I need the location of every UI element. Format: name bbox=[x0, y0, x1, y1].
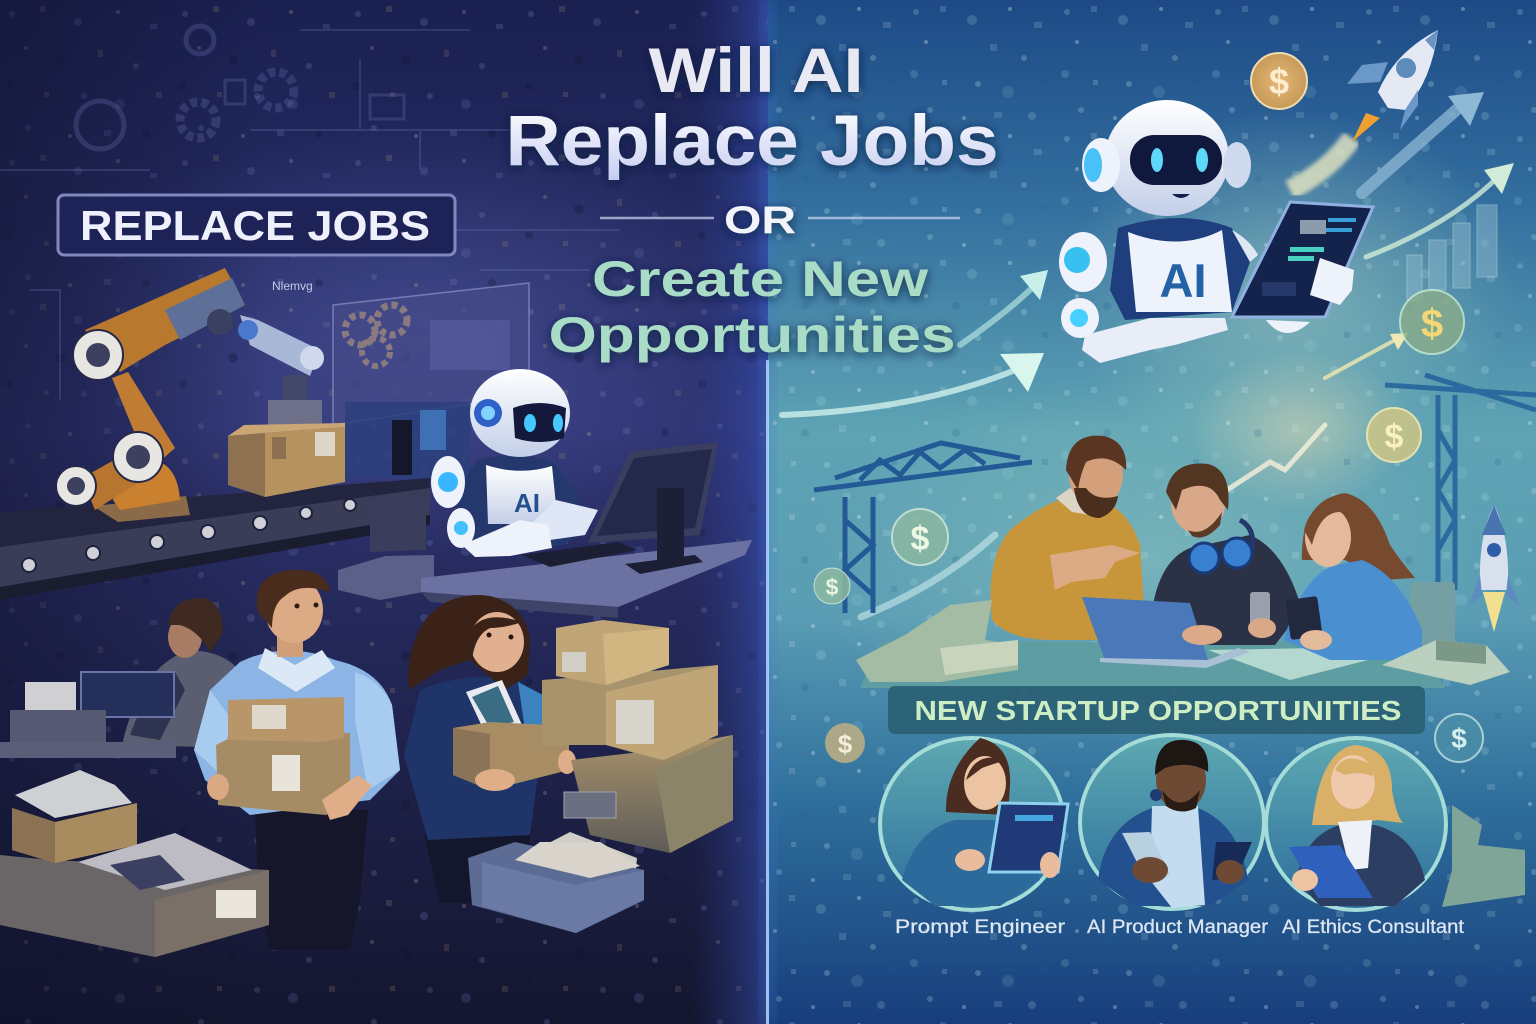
bar chart silhouettes bbox=[1407, 205, 1497, 300]
icon: background office worker bbox=[0, 598, 245, 758]
icon: dollar coins: $ bbox=[838, 729, 853, 759]
title line: OR: OR bbox=[724, 199, 796, 242]
icon: dollar coins: $ bbox=[1451, 723, 1467, 754]
conveyor belt bbox=[0, 478, 430, 600]
icon: orange robotic arm bbox=[56, 268, 324, 522]
icon: flying robot with tablet bbox=[1059, 100, 1373, 363]
icon: rocket with flame bbox=[1290, 30, 1438, 190]
boxes under conveyor bbox=[338, 495, 434, 600]
icon: man in yellow sweater bbox=[990, 436, 1146, 640]
label: AI Ethics Consultant: AI Ethics Consultant bbox=[1282, 917, 1465, 938]
icon: crane left bbox=[814, 443, 1032, 613]
banner: New Startup Opportunities: NEW STARTUP OPPORTUNITIES bbox=[914, 695, 1402, 726]
badge: Replace Jobs bbox=[58, 195, 455, 255]
label: Prompt Engineer: Prompt Engineer bbox=[895, 917, 1066, 938]
badge: Replace Jobs: REPLACE JOBS bbox=[80, 202, 430, 249]
file bin bbox=[468, 832, 644, 933]
desk bbox=[421, 540, 752, 618]
panel: left dark background bbox=[0, 0, 780, 1024]
stacked cardboard boxes bbox=[542, 620, 733, 853]
icon: dollar coins bbox=[814, 53, 1483, 763]
title line: Replace Jobs: Replace Jobs bbox=[506, 102, 998, 181]
icon: office robot with AI chest bbox=[431, 369, 598, 557]
icon: dollar coins: $ bbox=[826, 574, 839, 600]
box on conveyor bbox=[228, 423, 345, 497]
banner: New Startup Opportunities bbox=[888, 686, 1425, 734]
screen panel behind robot arm bbox=[272, 279, 529, 478]
icon: flying robot with tablet: AI bbox=[1160, 254, 1206, 307]
title line: Will AI: Will AI bbox=[648, 36, 864, 106]
icon: dollar coins: $ bbox=[1385, 418, 1404, 456]
icon: dollar coins: $ bbox=[1421, 302, 1443, 346]
boxes and papers bottom left bbox=[0, 770, 269, 957]
arrows across right panel bbox=[782, 92, 1514, 617]
icon: man carrying boxes bbox=[194, 570, 400, 950]
table and laptop bbox=[860, 582, 1455, 688]
role: AI Ethics Consultant portrait bbox=[1266, 738, 1446, 910]
icon: crane right bbox=[1385, 375, 1536, 590]
icon: woman in blue shirt bbox=[1248, 493, 1422, 660]
role: AI Product Manager portrait bbox=[1080, 735, 1264, 909]
background gears and circuits bbox=[0, 26, 620, 400]
title line: Create New: Create New bbox=[592, 251, 928, 307]
role: Prompt Engineer portrait bbox=[880, 738, 1068, 910]
icon: computer monitor bbox=[522, 442, 718, 574]
icon: laptop bbox=[1082, 597, 1250, 668]
title block bbox=[506, 36, 998, 363]
lines beside OR bbox=[600, 217, 960, 219]
panel: right bright background bbox=[768, 0, 1536, 1024]
icon: dollar coins: $ bbox=[911, 520, 930, 558]
icon: woman holding a box of files bbox=[404, 595, 576, 903]
money stacks bbox=[856, 600, 1525, 907]
label: AI Product Manager: AI Product Manager bbox=[1087, 917, 1269, 938]
icon: dollar coins: $ bbox=[1269, 61, 1289, 102]
icon: man with headphones bbox=[1152, 464, 1302, 645]
center divider line bbox=[760, 0, 776, 1024]
title line: Opportunities: Opportunities bbox=[548, 307, 956, 363]
role labels bbox=[895, 917, 1465, 938]
icon: small rocket lower right bbox=[1469, 505, 1520, 632]
screen panel behind robot arm: Nlemvg bbox=[272, 279, 313, 293]
icon: office robot with AI chest: AI bbox=[514, 488, 540, 518]
